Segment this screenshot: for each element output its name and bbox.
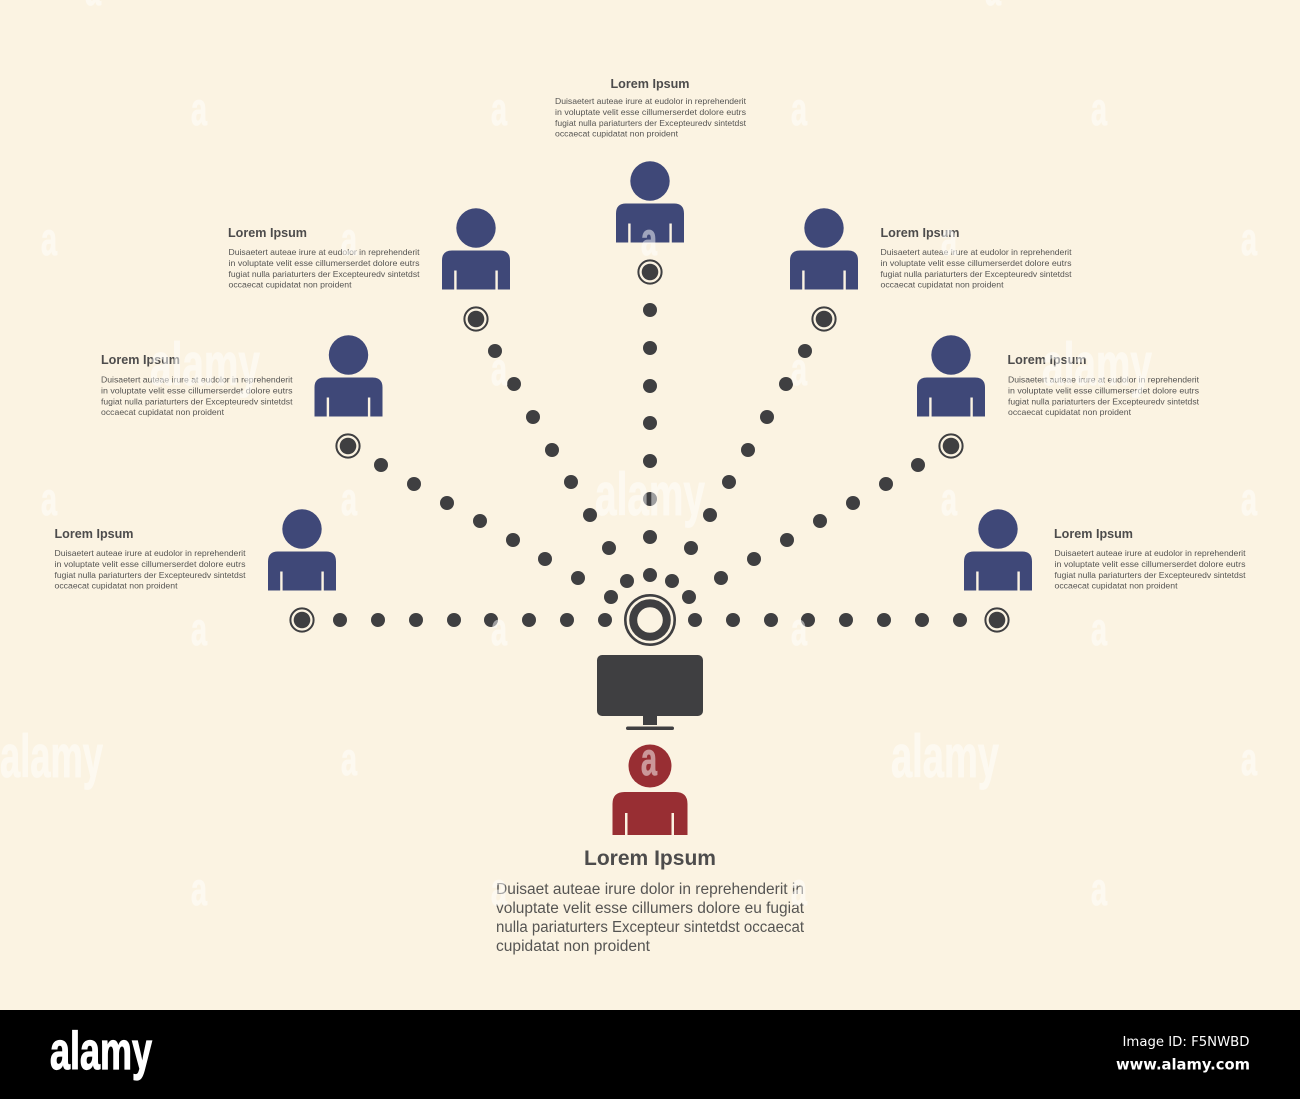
dotted connector: far left [333,613,612,627]
text block: upper right: Duisaetert auteae irure at eudolor in reprehenderit [880,247,1072,257]
text block: central person [496,847,805,955]
watermark overlay: a [1241,733,1257,785]
watermark overlay: a [641,213,657,265]
icon: person far left [268,509,336,590]
text block: mid right: Lorem Ipsum [1008,352,1086,367]
icon: person upper left [442,208,510,290]
text block: top [555,76,747,139]
watermark overlay: a [1091,863,1107,915]
watermark overlay: a [941,473,957,525]
watermark overlay: alamy [0,723,103,790]
text block: mid right: in voluptate velit esse cillumerserdet dolore eutrs [1008,386,1200,396]
text block: far right: fugiat nulla pariaturters der Excepteuredv sintetdst [1054,570,1246,580]
watermark overlay: a [1091,83,1107,135]
watermark overlay: a [1091,603,1107,655]
text block: top: Lorem Ipsum [610,76,690,91]
text block: far right: occaecat cupidatat non proident [1054,581,1178,591]
watermark overlay: a [491,863,507,915]
text block: mid left: Duisaetert auteae irure at eudolor in reprehenderit [101,374,293,384]
text block: central person: Lorem Ipsum [584,847,716,870]
text block: upper right: in voluptate velit esse cillumerserdet dolore eutrs [880,258,1072,268]
watermark overlay: a [791,343,807,395]
text block: upper right: occaecat cupidatat non proident [880,280,1004,290]
node: upper left [464,307,488,331]
text block: mid left: in voluptate velit esse cillumerserdet dolore eutrs [101,386,293,396]
watermark overlay: a [491,343,507,395]
node: mid right [939,434,963,458]
text block: far right [1054,526,1246,591]
text block: far left [54,526,246,591]
text block: far left: Duisaetert auteae irure at eudolor in reprehenderit [54,548,246,558]
text block: mid left: occaecat cupidatat non proident [101,407,225,417]
text block: upper left: in voluptate velit esse cillumerserdet dolore eutrs [228,258,420,268]
watermark overlay: a [491,83,507,135]
watermark overlay: a [1241,473,1257,525]
watermark overlay: a [191,863,207,915]
text block: mid right: occaecat cupidatat non proident [1008,407,1132,417]
icon: person upper right [790,208,858,290]
node: upper right [812,307,836,331]
watermark overlay: a [341,213,357,265]
text block: central person: cupidatat non proident [496,938,651,955]
icon: person mid left [314,335,382,416]
dotted connector: mid right [682,458,925,604]
dotted connector: mid left [374,458,618,604]
text block: top: in voluptate velit esse cillumerserdet dolore eutrs [555,107,747,117]
node: top [638,260,662,284]
watermark overlay: a [791,863,807,915]
text block: upper left: Duisaetert auteae irure at eudolor in reprehenderit [228,247,420,257]
text block: far right: Lorem Ipsum [1054,526,1133,541]
icon: central red person [612,744,688,835]
dotted connector: far right [688,613,967,627]
text block: far left: in voluptate velit esse cillumerserdet dolore eutrs [54,559,246,569]
watermark overlay: a [1241,213,1257,265]
footer bar [0,1010,1300,1099]
footer logo: alamy [50,1022,152,1081]
text block: upper right: fugiat nulla pariaturters der Excepteuredv sintetdst [880,269,1072,279]
text block: upper left: Lorem Ipsum [228,225,307,240]
text block: mid left: Lorem Ipsum [101,352,180,367]
text block: top: fugiat nulla pariaturters der Excepteuredv sintetdst [555,118,747,128]
text block: mid right [1008,352,1200,417]
text block: mid left: fugiat nulla pariaturters der Excepteuredv sintetdst [101,396,293,406]
text block: far right: in voluptate velit esse cillumerserdet dolore eutrs [1054,559,1246,569]
text block: central person: Duisaet auteae irure dolor in reprehenderit in [496,881,804,898]
text block: far right: Duisaetert auteae irure at eudolor in reprehenderit [1054,548,1246,558]
dotted connector: top [643,303,657,582]
text block: far left: fugiat nulla pariaturters der Excepteuredv sintetdst [54,570,246,580]
watermark overlay: alamy [595,461,705,528]
icon: person far right [964,509,1032,590]
footer image id: Image ID: F5NWBD [1122,1034,1250,1050]
watermark overlay: a [491,603,507,655]
icon: person mid right [917,335,985,416]
text block: upper right [880,225,1072,290]
icon: person top [616,161,684,242]
watermark overlay: alamy [891,723,999,790]
text block: mid right: fugiat nulla pariaturters der Excepteuredv sintetdst [1008,396,1200,406]
watermark overlay: a [191,83,207,135]
text block: mid left [101,352,293,417]
watermark overlay: alamy [1042,331,1152,398]
text block: top: Duisaetert auteae irure at eudolor in reprehenderit [555,96,747,106]
text block: upper left [228,225,420,290]
watermark overlay: alamy [150,331,260,398]
text block: central person: nulla pariaturters Excepteur sintetdst occaecat [496,919,805,936]
central hub ring [625,595,675,645]
dotted connector: upper right [665,344,812,588]
icon: monitor [597,655,703,730]
node: far right [985,608,1009,632]
dotted connector: upper left [488,344,634,588]
footer url: www.alamy.com [1116,1056,1250,1074]
node: far left [290,608,314,632]
text block: central person: voluptate velit esse cillumers dolore eu fugiat [496,900,805,917]
watermark overlay: a [341,733,357,785]
watermark overlay: a [941,213,957,265]
text block: upper right: Lorem Ipsum [880,225,960,240]
watermark overlay: a [641,733,657,785]
node: mid left [336,434,360,458]
watermark overlay: a [41,473,57,525]
text block: far left: Lorem Ipsum [54,526,134,541]
text block: top: occaecat cupidatat non proident [555,129,679,139]
watermark overlay: a [41,213,57,265]
watermark overlay: a [791,83,807,135]
watermark overlay: a [341,473,357,525]
text block: upper left: fugiat nulla pariaturters der Excepteuredv sintetdst [228,269,420,279]
watermark overlay: a [791,603,807,655]
text block: far left: occaecat cupidatat non proident [54,581,178,591]
watermark overlay: a [191,603,207,655]
text block: mid right: Duisaetert auteae irure at eudolor in reprehenderit [1008,374,1200,384]
text block: upper left: occaecat cupidatat non proident [228,280,352,290]
